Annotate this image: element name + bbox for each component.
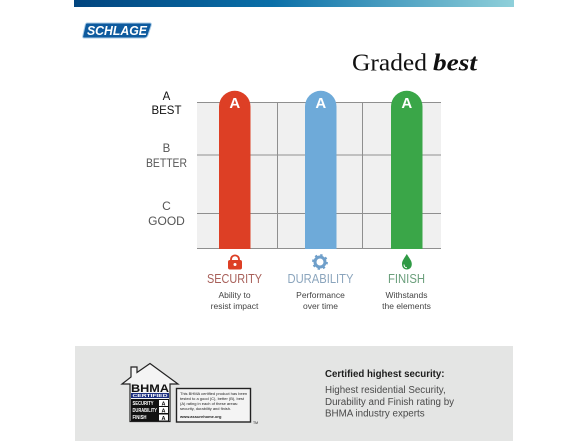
bar: durability	[305, 91, 336, 249]
title: best	[433, 50, 479, 76]
title: Graded	[352, 50, 427, 76]
top gradient bar	[74, 0, 514, 7]
BHMA badge: SECURITY	[132, 401, 154, 407]
bar: security: A	[229, 95, 240, 112]
column: finish: the elements	[382, 301, 431, 311]
BHMA badge: DURABILITY	[132, 408, 158, 414]
BHMA badge: A	[162, 408, 166, 414]
panel: certification	[75, 346, 513, 441]
column: durability: Performance	[296, 290, 345, 300]
BHMA badge	[122, 364, 258, 425]
axis label: B better: BETTER	[146, 158, 187, 170]
axis label: C good: C	[162, 199, 171, 213]
callout text: Durability and Finish rating by	[325, 397, 454, 408]
house outline	[122, 364, 178, 422]
BHMA statement box: www.assurehome.org	[179, 414, 222, 419]
title	[352, 50, 479, 76]
chart: grade grid	[197, 91, 441, 249]
BHMA statement box: (A) rating in each of these areas:	[180, 401, 238, 406]
bar: finish: A	[401, 95, 412, 112]
column: security: resist impact	[211, 301, 259, 311]
BHMA statement box: tested to a good (C), better (B), best	[180, 396, 245, 401]
BHMA statement box: security, durability and finish.	[180, 406, 231, 411]
column: durability: over time	[303, 301, 338, 311]
callout text: BHMA industry experts	[325, 408, 425, 420]
column: durability	[288, 272, 354, 311]
icon: lock	[228, 255, 242, 270]
column: security	[207, 272, 263, 311]
column: security: Ability to	[218, 290, 251, 300]
Schlage logo: SCHLAGE	[87, 24, 148, 38]
BHMA statement box	[176, 388, 250, 422]
column: finish: Withstands	[385, 290, 428, 300]
bar: durability: A	[315, 95, 326, 112]
callout text: Highest residential Security,	[325, 385, 446, 396]
grid background	[197, 102, 441, 249]
icon: drop	[402, 254, 412, 270]
BHMA badge: CERTIFIED	[132, 393, 169, 398]
BHMA badge: TM	[253, 421, 258, 425]
icon: gear	[313, 255, 327, 269]
axis label: A best: BEST	[151, 105, 182, 117]
BHMA badge: FINISH	[132, 415, 147, 421]
axis label: C good: GOOD	[148, 214, 185, 228]
callout heading: Certified highest security:	[325, 369, 445, 380]
axis label: B better: B	[163, 143, 171, 155]
BHMA statement box: This BHMA certified product has been	[180, 391, 247, 396]
BHMA badge: A	[162, 416, 166, 422]
column: durability: DURABILITY	[288, 272, 354, 286]
bar: security	[219, 91, 250, 249]
column: security: SECURITY	[207, 272, 263, 286]
bar: finish	[391, 91, 422, 249]
column: finish: FINISH	[388, 272, 425, 286]
axis label: A best: A	[163, 91, 171, 103]
BHMA badge: BHMA	[131, 383, 169, 395]
column: finish	[382, 272, 431, 311]
BHMA badge: A	[162, 402, 166, 408]
